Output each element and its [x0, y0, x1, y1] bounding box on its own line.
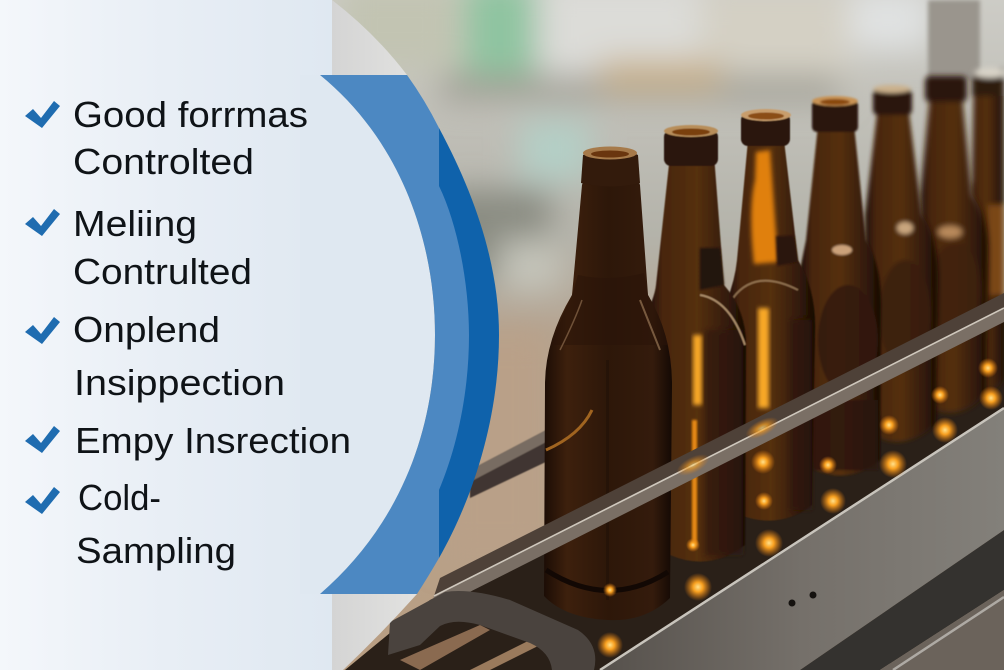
- item: cold sampling: [25, 477, 236, 571]
- item: empty inspection: Empy Insrection: [75, 420, 351, 461]
- back guide rail: [470, 428, 550, 498]
- bottle 1: foreground: [544, 146, 672, 620]
- item: cold sampling: Cold-: [78, 477, 161, 518]
- amber glows: [597, 358, 1003, 658]
- item: on-blend inspection: [25, 309, 285, 403]
- item: on-blend inspection: Onplend: [73, 309, 220, 350]
- inner light panel: [300, 75, 435, 594]
- bottle 5: [865, 85, 938, 442]
- mid blue arc: [320, 75, 469, 594]
- panel: checklist background: [0, 0, 499, 670]
- bottle 2: [648, 125, 746, 562]
- front rail: [430, 293, 1004, 612]
- checklist: [25, 94, 351, 571]
- bottle 4: [800, 96, 881, 476]
- bottle 7: [971, 68, 1004, 400]
- item: good forms: Good forrmas: [73, 94, 308, 135]
- item: melting: Meliing: [73, 203, 197, 244]
- item: on-blend inspection: Insippection: [74, 362, 285, 403]
- dark blue arc: [439, 128, 499, 558]
- bottle row: [544, 68, 1004, 620]
- item: cold sampling: Sampling: [76, 530, 236, 571]
- item: good forms: Controlted: [73, 141, 254, 182]
- bottle 3: [727, 109, 815, 521]
- item: good forms: [25, 94, 308, 182]
- holes: [788, 592, 816, 606]
- conveyor tray: [600, 408, 1004, 670]
- conveyor floor: [345, 310, 1004, 670]
- item: melting: Contrulted: [73, 251, 252, 292]
- grey corner band: [332, 0, 417, 670]
- item: melting: [25, 203, 252, 292]
- bottle 6: [920, 76, 988, 413]
- rollers and strap: [388, 591, 595, 670]
